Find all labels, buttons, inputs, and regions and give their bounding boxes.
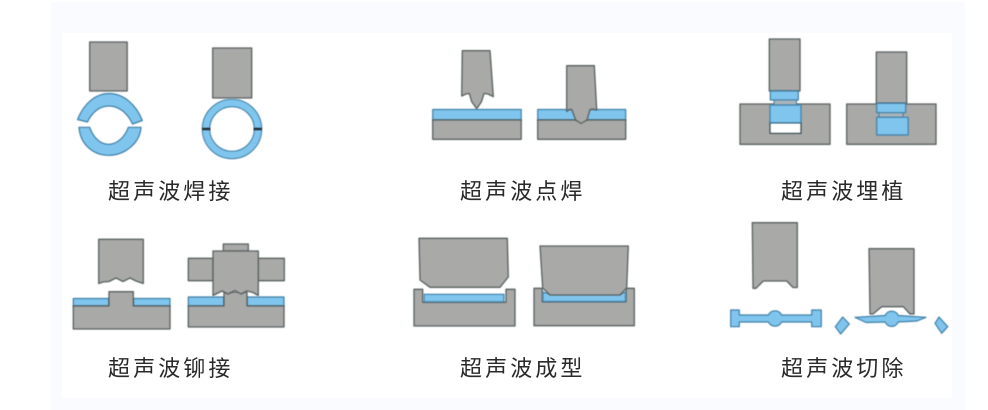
label: 超声波铆接 [108,356,234,381]
horn right [876,52,907,103]
base with post before [73,292,170,329]
cavity left [770,123,801,133]
blue sheet left [433,110,521,120]
spot tool after [567,66,597,124]
base with post after [188,292,284,327]
panel: ultrasonic welding [78,42,262,204]
spot tool before [462,51,493,109]
insert right [877,103,908,135]
insert left [770,91,801,123]
cutting tool after [869,249,914,314]
panel: ultrasonic cutting [731,223,948,381]
forming tool before [419,238,508,287]
blue formed sheet [543,292,626,302]
cut-off piece right [935,317,948,333]
blue part before [731,310,821,327]
panel: ultrasonic riveting [73,239,284,381]
horn left [769,39,800,91]
rivet press assembly [188,244,284,296]
horn before welding [90,42,127,91]
blue sheets after [188,297,284,306]
mold after [534,288,634,326]
horn after welding [213,48,252,98]
welded ring [202,103,262,155]
mold before [414,289,515,326]
gray base left [433,120,521,139]
blue part after [855,311,926,326]
forming tool after [540,246,628,295]
base right [847,104,936,144]
gray base right [538,120,626,139]
label: 超声波成型 [460,356,586,381]
label: 超声波点焊 [460,179,586,204]
rivet tool before [99,239,143,284]
blue sheet right [538,110,626,120]
blue sheet before [424,294,504,302]
label: 超声波切除 [781,356,907,381]
label: 超声波焊接 [108,179,234,204]
cut-off piece left [835,317,849,334]
blue sheets before [73,298,170,306]
base left [740,104,830,144]
lower half ring [79,127,141,155]
panel: ultrasonic forming [414,238,634,381]
panel: ultrasonic embedding [740,39,936,204]
panel: ultrasonic spot welding [433,51,626,204]
cutting tool before [752,223,797,288]
upper half ring [78,94,142,124]
label: 超声波埋植 [781,179,907,204]
